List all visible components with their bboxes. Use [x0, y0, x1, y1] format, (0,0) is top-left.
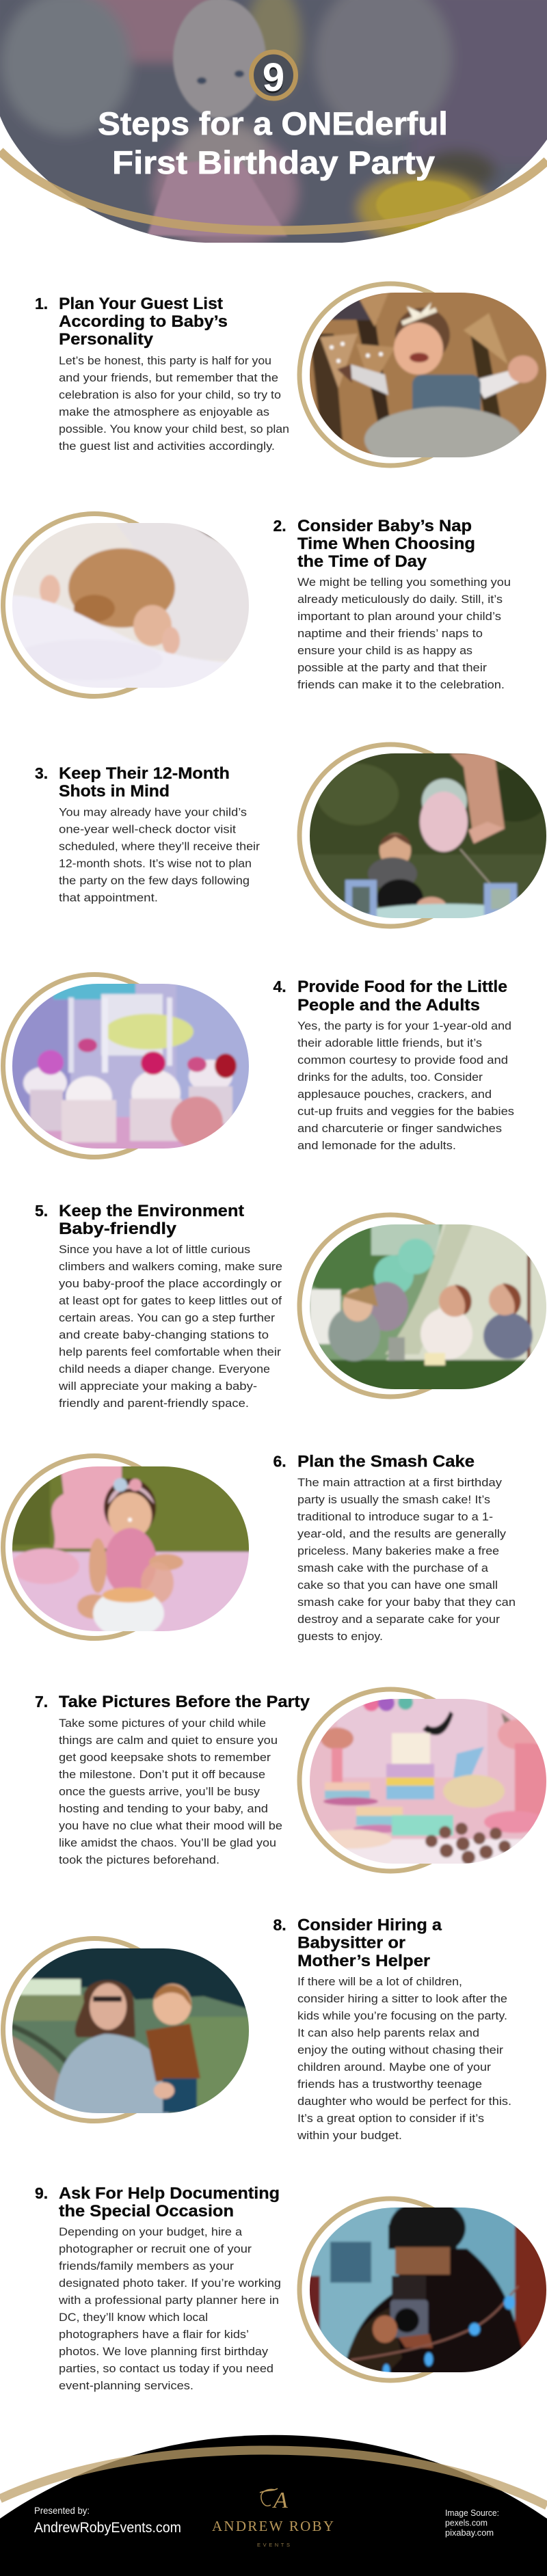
heading	[297, 1916, 442, 1970]
body text: You may already have your child’s	[59, 805, 247, 819]
body text: parties, so contact us today if you need	[59, 2362, 274, 2375]
decorative ring	[3, 1456, 186, 1638]
body text: and lemonade for the adults.	[297, 1139, 456, 1152]
step number: 4.	[274, 978, 286, 995]
body text: cake so that you can have one small	[297, 1579, 498, 1592]
panel: step 7	[35, 1689, 547, 1871]
heading: Plan the Smash Cake	[297, 1452, 475, 1471]
count badge: 9: 9	[263, 55, 284, 100]
body text: climbers and walkers coming, make sure	[59, 1260, 282, 1273]
body text: took the pictures beforehand.	[59, 1853, 219, 1866]
body text: things are calm and quiet to ensure you	[59, 1734, 278, 1747]
body text: smash cake for your baby that they can	[297, 1596, 516, 1609]
photo: baby with smash cake	[9, 1463, 252, 1638]
body text: naptime and their friends’ naps to	[297, 627, 483, 640]
body text: important to plan around your child’s	[297, 610, 501, 623]
body text: It can also help parents relax and	[297, 2026, 479, 2039]
decorative ring	[299, 1689, 481, 1871]
body text	[297, 1019, 514, 1152]
step number: 7.	[35, 1693, 48, 1710]
photo: babies by a teepee	[296, 1221, 547, 1393]
body text: photos. We love planning first birthday	[59, 2345, 269, 2358]
body text: like amidst the chaos. You’ll be glad you	[59, 1836, 276, 1849]
heading: Baby-friendly	[59, 1220, 177, 1238]
heading: Personality	[59, 330, 154, 349]
heading	[59, 295, 228, 349]
panel: step 4	[3, 975, 514, 1157]
header banner	[0, 0, 547, 260]
body text: the milestone. Don’t put it off because	[59, 1768, 265, 1781]
body text: destroy and a separate cake for your	[297, 1613, 500, 1626]
footer	[0, 2435, 547, 2576]
body text: cut-up fruits and veggies for the babies	[297, 1105, 514, 1118]
photo: cupcakes with flowers	[9, 980, 252, 1152]
body text	[59, 805, 260, 904]
panel: step 1	[35, 284, 547, 472]
body text: party is usually the smash cake! It’s	[297, 1493, 490, 1506]
footer black dome	[0, 2435, 547, 2576]
body text: child needs a diaper change. Everyone	[59, 1363, 270, 1376]
heading: Consider Hiring a	[297, 1916, 442, 1935]
body text: consider hiring a sitter to look after the	[297, 1992, 507, 2005]
body text: within your budget.	[297, 2129, 402, 2142]
body text: Depending on your budget, hire a	[59, 2225, 243, 2238]
body text: guests to enjoy.	[297, 1630, 383, 1643]
logo: Andrew Roby Events	[212, 2488, 334, 2548]
body text: traditional to introduce sugar to a 1-	[297, 1510, 493, 1523]
step number: 5.	[35, 1202, 48, 1220]
heading	[297, 517, 475, 571]
heading	[59, 1202, 244, 1238]
panel: step 8	[3, 1916, 511, 2142]
body text: already meticulously do daily. Still, it’s	[297, 593, 503, 606]
heading: Plan Your Guest List	[59, 295, 223, 313]
panel: step 2	[3, 514, 511, 696]
body text: celebration is also for your child, so try to	[59, 388, 281, 401]
body text: photographers have a flair for kids’	[59, 2328, 249, 2341]
logo: Andrew Roby Events: ANDREW ROBY	[212, 2518, 334, 2534]
body text: get good keepsake shots to remember	[59, 1751, 271, 1764]
heading	[297, 978, 507, 1015]
body text: the guest list and activities accordingly.	[59, 440, 275, 453]
body text: friends has a trustworthy teenage	[297, 2078, 482, 2091]
body text: that appointment.	[59, 891, 158, 904]
step number: 1.	[35, 295, 48, 312]
photo: sleeping child	[9, 520, 252, 691]
presented by: AndrewRobyEvents.com	[34, 2520, 181, 2536]
body text: friends/family members as your	[59, 2259, 234, 2272]
body text: common courtesy to provide food and	[297, 1054, 508, 1066]
heading: Mother’s Helper	[297, 1952, 430, 1970]
image source: pixabay.com	[445, 2527, 494, 2538]
count badge: 9: 9	[263, 57, 284, 102]
body text: hosting and tending to your baby, and	[59, 1802, 268, 1815]
photo: laughing baby in overalls	[310, 293, 546, 457]
body text: enjoy the outing without chasing their	[297, 2043, 503, 2056]
heading: Keep Their 12-Month	[59, 764, 230, 783]
body text: scheduled, where they’ll receive their	[59, 840, 260, 853]
body text: DC, they’ll know which local	[59, 2311, 208, 2324]
heading: the Time of Day	[297, 552, 427, 571]
heading: Ask For Help Documenting	[59, 2184, 280, 2203]
image source	[445, 2508, 499, 2538]
body text: The main attraction at a first birthday	[297, 1476, 503, 1489]
body text: and create baby-changing stations to	[59, 1328, 269, 1341]
header photo: baby with balloons	[0, 0, 547, 260]
heading: Consider Baby’s Nap	[297, 517, 472, 535]
step number: 8.	[274, 1916, 286, 1933]
title	[98, 105, 448, 180]
decorative ring	[299, 2199, 481, 2380]
body text: will appreciate your making a baby-	[58, 1380, 257, 1393]
body text: Take some pictures of your child while	[59, 1717, 266, 1730]
body text: make the atmosphere as enjoyable as	[59, 405, 269, 418]
body text: with a professional party planner here in	[58, 2294, 279, 2307]
body text: their adorable little friends, but it’s	[297, 1036, 482, 1049]
panel: step 3	[35, 744, 547, 938]
body text: kids while you’re focusing on the party.	[297, 2009, 507, 2022]
heading: the Special Occasion	[59, 2202, 234, 2221]
body text: possible at the party and that their	[297, 661, 487, 674]
decorative ring	[299, 1215, 481, 1397]
photo: photographer with camera	[306, 2199, 547, 2376]
count badge: 9	[252, 52, 295, 102]
heading: Provide Food for the Little	[297, 978, 507, 996]
logo: Andrew Roby Events: A	[272, 2488, 288, 2513]
heading: Shots in Mind	[59, 782, 170, 801]
body text: Yes, the party is for your 1-year-old and	[297, 1019, 511, 1032]
body text: once the guests arrive, you’ll be busy	[59, 1785, 261, 1798]
image source: pexels.com	[445, 2517, 488, 2528]
body text: certain areas. You can go a step further	[59, 1311, 275, 1324]
presented by	[34, 2505, 181, 2536]
body text: children around. Maybe one of your	[297, 2061, 491, 2074]
presented by: Presented by:	[34, 2505, 90, 2516]
body text: and your friends, but remember that the	[59, 371, 278, 384]
heading	[59, 764, 230, 801]
step number: 2.	[274, 517, 286, 535]
body text: It’s a great option to consider if it’s	[297, 2112, 484, 2125]
body text: at least opt for gates to keep littles out of	[59, 1294, 282, 1307]
body text: We might be telling you something you	[297, 576, 511, 589]
body text: you have no clue what their mood will be	[59, 1819, 282, 1832]
gold arc	[0, 151, 547, 230]
photo: unicorn dessert table	[306, 1695, 547, 1867]
body text: 12-month shots. It’s wise not to plan	[59, 857, 252, 870]
panel: step 9	[35, 2184, 547, 2392]
heading: According to Baby’s	[59, 312, 228, 331]
step number: 9.	[35, 2184, 48, 2202]
heading: People and the Adults	[297, 996, 480, 1015]
heading: Time When Choosing	[297, 535, 475, 553]
decorative ring	[3, 975, 186, 1157]
body text	[297, 576, 511, 691]
body text: ensure your child is as happy as	[297, 644, 472, 657]
step number: 6.	[274, 1452, 286, 1470]
body text: friends can make it to the celebration.	[297, 678, 505, 691]
heading: Keep the Environment	[59, 1202, 244, 1220]
body text: If there will be a lot of children,	[297, 1975, 462, 1988]
body text: applesauce pouches, crackers, and	[297, 1088, 492, 1101]
body text: Let’s be honest, this party is half for you	[59, 354, 271, 367]
body text: designated photo taker. If you’re working	[59, 2277, 281, 2290]
image source: Image Source:	[445, 2508, 499, 2518]
body text: possible. You know your child best, so plan	[59, 422, 289, 435]
decorative ring	[3, 1939, 186, 2121]
body text: smash cake with the purchase of a	[297, 1561, 489, 1574]
photo: mother holding child	[9, 1945, 252, 2119]
body text: and charcuterie or finger sandwiches	[297, 1122, 502, 1135]
footer gold arc	[0, 2450, 547, 2506]
body text: help parents feel comfortable when their	[59, 1345, 281, 1358]
title: First Birthday Party	[112, 144, 435, 180]
body text: one-year well-check doctor visit	[59, 823, 236, 835]
logo: Andrew Roby Events: EVENTS	[257, 2542, 290, 2548]
body text: photographer or recruit one of your	[59, 2242, 252, 2255]
body text	[297, 1476, 516, 1643]
panel: step 6	[3, 1452, 516, 1643]
photo: baby with number one balloon	[310, 753, 546, 918]
body text	[59, 354, 289, 453]
body text	[59, 1717, 282, 1866]
body text: event-planning services.	[59, 2379, 194, 2392]
decorative ring	[299, 284, 481, 466]
panel: step 5	[35, 1202, 547, 1410]
body text	[297, 1975, 511, 2142]
body text: you baby-proof the place accordingly or	[59, 1277, 282, 1290]
title: Steps for a ONEderful	[98, 105, 448, 142]
heading: Babysitter or	[297, 1933, 405, 1953]
body text: drinks for the adults, too. Consider	[297, 1071, 483, 1084]
body text: year-old, and the results are generally	[297, 1527, 507, 1540]
body text: friendly and parent-friendly space.	[59, 1397, 249, 1410]
body text: Since you have a lot of little curious	[59, 1243, 250, 1256]
step number: 3.	[35, 764, 48, 782]
body text: the party on the few days following	[59, 874, 250, 887]
body text	[58, 1243, 282, 1410]
heading	[59, 2184, 280, 2221]
decorative ring	[3, 514, 186, 696]
body text	[58, 2225, 281, 2392]
heading: Take Pictures Before the Party	[59, 1693, 310, 1711]
body text: daughter who would be perfect for this.	[297, 2095, 511, 2108]
body text: priceless. Many bakeries make a free	[297, 1544, 499, 1557]
decorative ring	[299, 744, 481, 926]
